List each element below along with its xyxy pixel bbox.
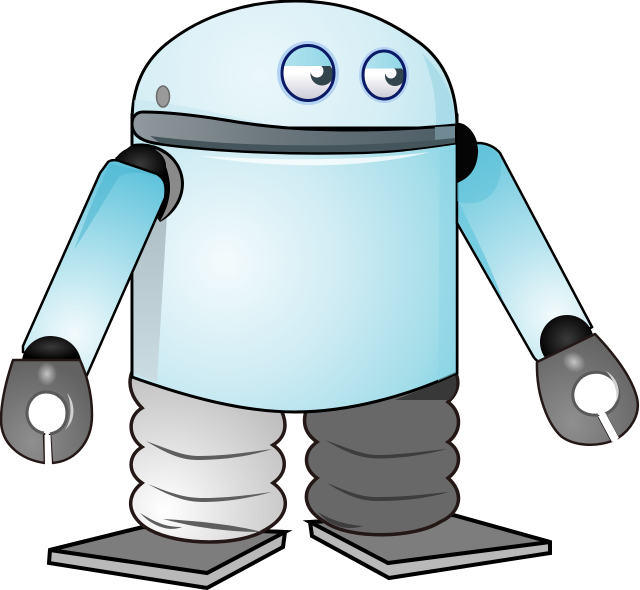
hand highlight [37, 362, 57, 386]
leg creases [140, 441, 272, 532]
shadow under body [395, 376, 456, 400]
hand hole ring [27, 392, 67, 434]
right eye [359, 47, 409, 103]
left leg [130, 372, 285, 542]
body right stripe [438, 143, 456, 381]
hand slit [598, 413, 619, 442]
robot body [132, 115, 457, 412]
body top highlight [200, 152, 430, 165]
head indicator light [156, 86, 170, 107]
hand hole ring [573, 372, 619, 415]
right wrist ball [540, 315, 594, 369]
left eye [277, 41, 339, 105]
right leg [305, 368, 458, 535]
robot head dome [132, 1, 457, 130]
head lower shine [134, 100, 300, 130]
right arm [457, 143, 592, 362]
left shoulder joint [114, 143, 184, 222]
right shoulder overlay [457, 124, 478, 183]
hand slit [44, 435, 52, 465]
arm inner shade [74, 164, 160, 250]
left wrist ball [22, 336, 81, 360]
head band [132, 112, 456, 153]
arm shade [457, 146, 501, 203]
body left shine [134, 215, 167, 382]
left foot [49, 527, 285, 588]
right foot [310, 515, 550, 578]
right hand [537, 334, 638, 445]
head right shine [422, 53, 455, 128]
right shoulder joint [434, 123, 478, 183]
band lower shade [150, 136, 455, 152]
band right tint [435, 126, 455, 145]
hand highlight [559, 347, 589, 377]
leg creases [318, 440, 449, 528]
left arm [23, 160, 166, 375]
left hand [1, 360, 92, 465]
